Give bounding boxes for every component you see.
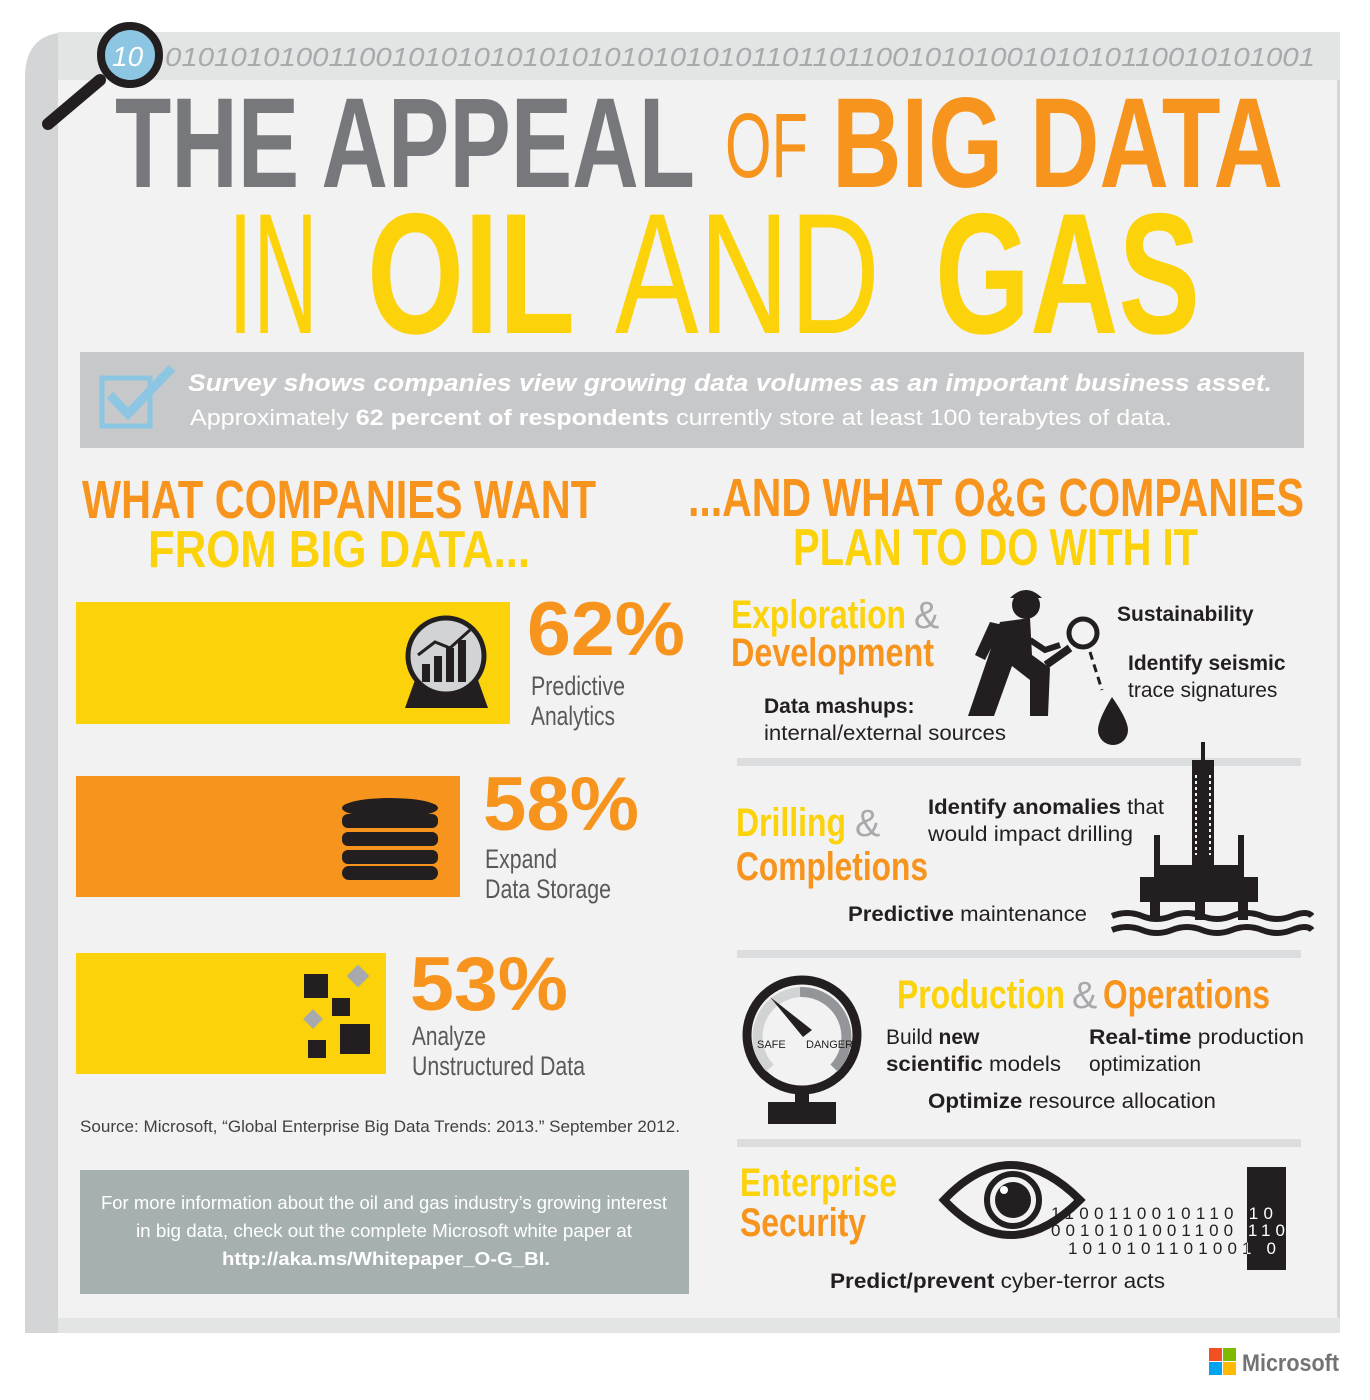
binary block: 0010101001100 110 <box>1051 1221 1285 1240</box>
icon: gauge: DANGER <box>806 1039 853 1051</box>
panel: production <box>747 973 1304 1124</box>
bar: 58%: Expand <box>485 844 557 874</box>
survey banner <box>80 352 1304 448</box>
heading left <box>82 470 596 579</box>
more info box: in big data, check out the complete Microsoft white paper at <box>136 1221 632 1241</box>
bar: 53%: Analyze <box>412 1021 486 1051</box>
bar: 62%: Predictive <box>531 671 625 701</box>
panel: exploration: Development <box>731 631 934 675</box>
panel: production: & <box>1072 975 1097 1017</box>
panel: exploration: trace signatures <box>1128 679 1277 702</box>
panel: drilling: Identify anomalies that <box>928 796 1164 819</box>
title: AND <box>615 178 880 370</box>
heading left: FROM BIG DATA... <box>148 521 530 579</box>
icon: squares <box>303 965 370 1058</box>
icon: gauge <box>747 980 857 1124</box>
binary block: 1010101101001 0 <box>1068 1239 1276 1258</box>
icon: oil rig <box>1112 742 1312 933</box>
binary block: 1010101101001 0 <box>1068 1239 1276 1258</box>
icon: database <box>342 798 438 880</box>
panel: drilling: & <box>855 803 880 845</box>
bar: 58% <box>76 762 639 904</box>
panel: security: Enterprise <box>740 1161 897 1205</box>
binary block: 1100110010110 10 <box>1051 1204 1273 1223</box>
panel: exploration: Data mashups: <box>764 695 915 718</box>
bar: 53%: 53% <box>410 942 568 1027</box>
icon: checkbox <box>102 368 172 426</box>
title <box>115 72 1283 370</box>
icon: magnifying glass <box>48 26 159 124</box>
bar: 58%: Data Storage <box>485 874 611 904</box>
panel: security <box>740 1161 1286 1293</box>
title: THE APPEAL <box>115 72 695 215</box>
survey banner: Approximately 62 percent of respondents currently store at least 100 terabytes of data. <box>190 405 1172 430</box>
heading right: PLAN TO DO WITH IT <box>793 519 1198 577</box>
more info box: For more information about the oil and gas industry’s growing interest <box>101 1193 667 1213</box>
title: OIL <box>367 178 575 370</box>
bar: 62%: Analytics <box>531 701 615 731</box>
panel: drilling: Completions <box>736 845 928 889</box>
logo: microsoft <box>1209 1348 1339 1377</box>
title: OF <box>725 95 808 197</box>
panel: production: Operations <box>1103 973 1270 1017</box>
icon: gauge: SAFE <box>757 1039 786 1051</box>
title: IN <box>228 178 318 370</box>
more info box <box>80 1170 689 1294</box>
logo: microsoft: Microsoft <box>1242 1350 1339 1377</box>
survey banner: Survey shows companies view growing data volumes as an important business asset. <box>188 370 1272 397</box>
panel: exploration: Exploration <box>731 593 906 637</box>
source: Source: Microsoft, “Global Enterprise Big Data Trends: 2013.” September 2012. <box>80 1117 680 1136</box>
panel: exploration <box>731 590 1286 745</box>
panel: drilling: would impact drilling <box>927 823 1133 846</box>
bar: 62%: 62% <box>527 587 685 672</box>
icon: eye <box>944 1165 1080 1235</box>
binary block: 1100110010110 10 <box>1051 1204 1273 1223</box>
panel: production: Production <box>897 973 1065 1017</box>
icon: crystal ball <box>405 618 488 708</box>
panel: production: Real-time production <box>1089 1026 1304 1049</box>
more info box: http://aka.ms/Whitepaper_O-G_BI. <box>222 1249 550 1269</box>
icon: magnifying glass: 10 <box>112 41 144 72</box>
title: GAS <box>935 178 1200 370</box>
dividers <box>737 758 1301 766</box>
heading left: WHAT COMPANIES WANT <box>82 470 596 530</box>
bar: 58%: 58% <box>483 762 639 847</box>
binary block: 0010101001100 110 <box>1051 1221 1285 1240</box>
panel: exploration: Identify seismic <box>1128 652 1286 675</box>
panel: security: Predict/prevent cyber-terror acts <box>830 1270 1165 1293</box>
bar: 53% <box>76 942 586 1081</box>
panel: drilling: Drilling <box>736 801 846 845</box>
icon: worker <box>968 590 1128 745</box>
bar: 62% <box>76 587 685 731</box>
panel: production: optimization <box>1089 1053 1201 1076</box>
bar: 53%: Unstructured Data <box>412 1051 586 1081</box>
binary strip: 01010101001100101010101010101010101011011011001010100101010110010101001 <box>165 42 1315 72</box>
panel: exploration: internal/external sources <box>764 722 1006 745</box>
panel: drilling: Predictive maintenance <box>848 903 1087 926</box>
panel: production: Optimize resource allocation <box>928 1090 1216 1113</box>
panel: security: Security <box>740 1201 867 1245</box>
panel: drilling <box>736 742 1312 933</box>
panel: exploration: & <box>914 595 939 637</box>
panel: production: Build new <box>886 1026 980 1049</box>
binary block <box>1051 1167 1286 1270</box>
panel: exploration: Sustainability <box>1117 603 1254 626</box>
panel: production: scientific models <box>886 1053 1061 1076</box>
heading right <box>688 468 1304 577</box>
